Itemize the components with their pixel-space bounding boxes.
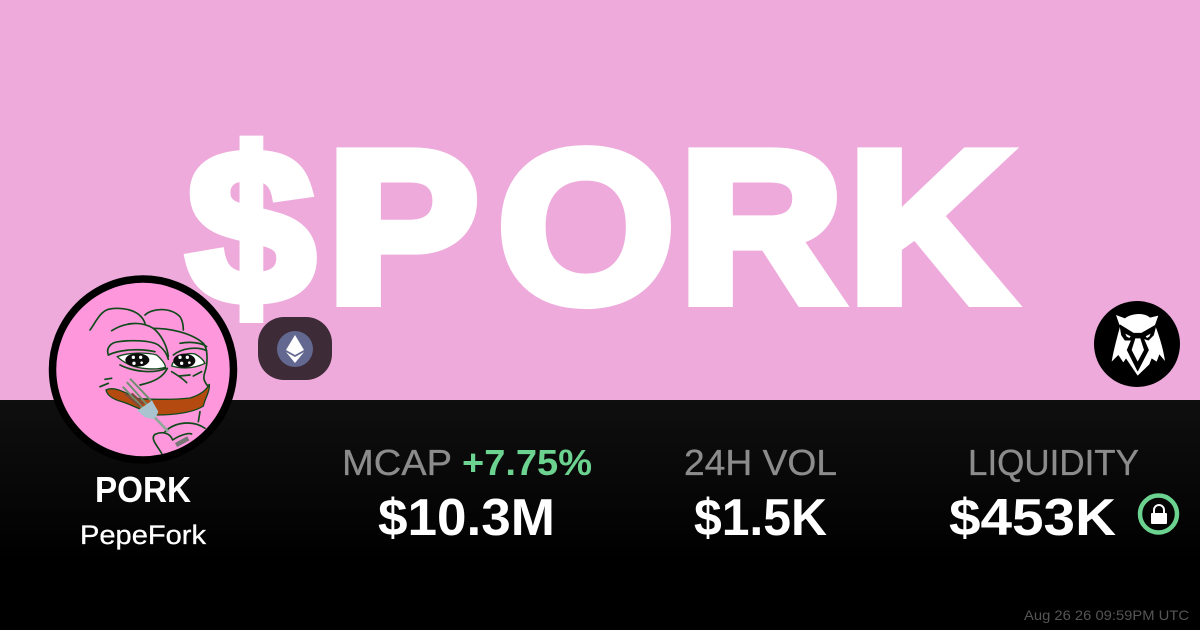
token name: PepeFork <box>80 520 207 550</box>
stat: liquidity: LIQUIDITY <box>968 442 1139 483</box>
pepe head outline <box>90 308 208 453</box>
token avatar <box>52 279 234 460</box>
stat: market cap: MCAP <box>342 442 452 483</box>
icon: eagle logo <box>1094 301 1180 387</box>
stat: market cap: $10.3M <box>378 489 555 547</box>
stat: market cap <box>342 442 592 547</box>
fork <box>123 379 188 445</box>
chain badge <box>258 317 332 380</box>
pepe left eye <box>117 353 165 369</box>
stat: liquidity: $453K <box>949 489 1116 547</box>
token symbol: PORK <box>95 469 191 510</box>
pepe right eye <box>172 354 205 368</box>
stats panel background <box>0 400 1200 630</box>
stat: liquidity <box>949 442 1139 547</box>
stat: market cap: +7.75% <box>462 442 592 483</box>
icon: liquidity lock <box>1140 496 1177 532</box>
icon: ethereum <box>277 331 313 367</box>
stat: 24h volume: 24H VOL <box>684 442 837 483</box>
banner background <box>0 0 1200 400</box>
banner title: $PORK <box>187 107 1013 348</box>
stat: 24h volume: $1.5K <box>694 489 827 547</box>
stat: 24h volume <box>684 442 837 547</box>
timestamp: Aug 26 26 09:59PM UTC <box>1024 607 1189 623</box>
pepe lips <box>106 384 209 415</box>
